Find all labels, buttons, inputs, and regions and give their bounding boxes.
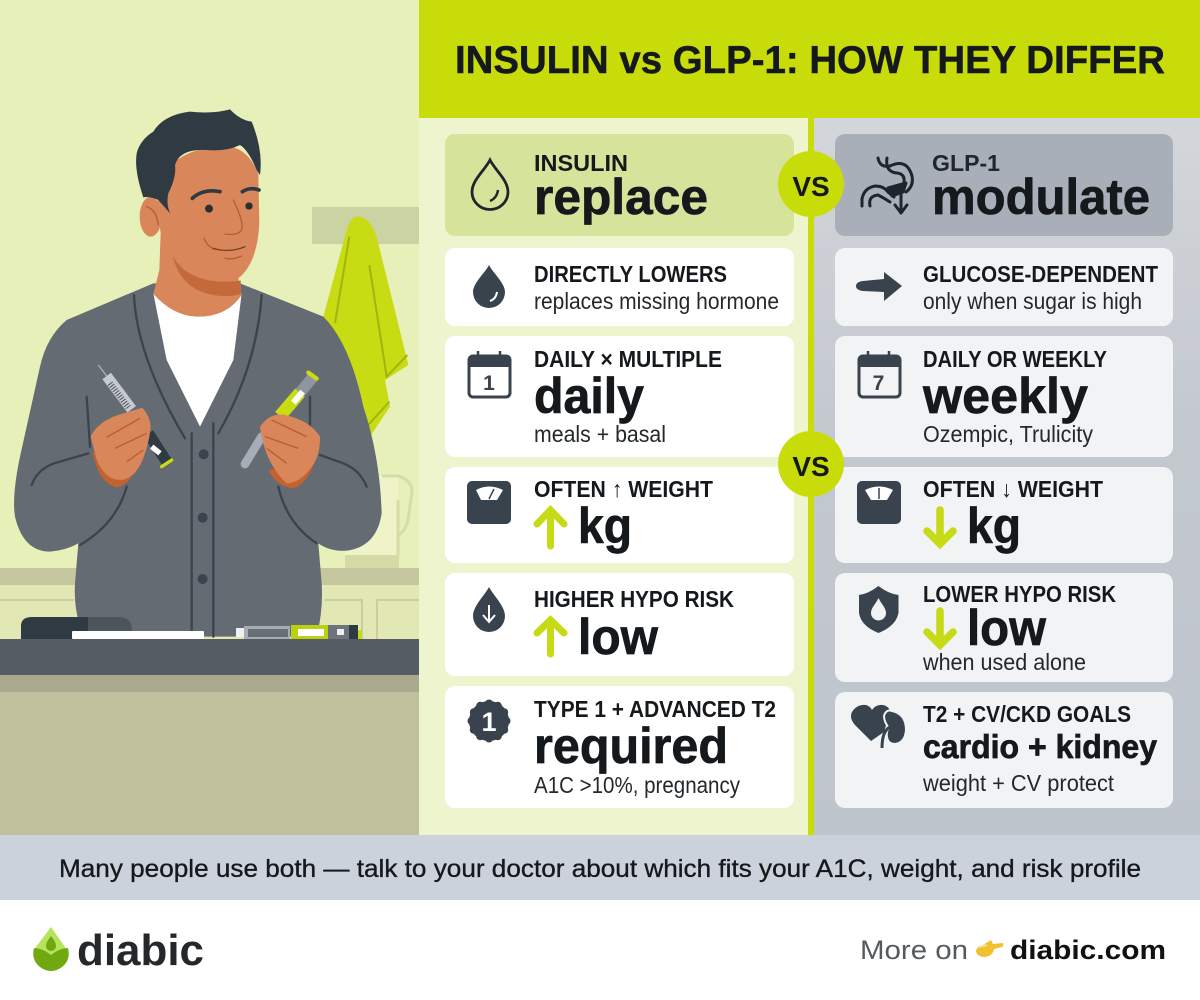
footer link: More on (860, 935, 968, 965)
card: lower hypo risk: low (967, 600, 1046, 656)
card: hypo risk (445, 573, 794, 676)
bottom note band (0, 835, 1200, 900)
towel rail (312, 207, 419, 244)
icon: pointing hand (976, 940, 1003, 957)
card: weekly dosing: DAILY OR WEEKLY (923, 346, 1107, 372)
card: heart and kidney benefits: T2 + CV/CKD GOALS (923, 701, 1131, 727)
icon: filled drop (473, 265, 505, 308)
arrow up (537, 620, 564, 654)
arrow up (537, 510, 564, 546)
face and neck (153, 147, 259, 317)
card: weekly dosing: weekly (922, 368, 1088, 424)
card: who needs insulin: A1C >10%, pregnancy (534, 772, 740, 798)
cardigan seams (32, 295, 367, 637)
card: directly lowers (445, 248, 794, 326)
bottom note band: Many people use both — talk to your doctor about which fits your A1C, weight, and risk profile (59, 855, 1141, 883)
card: heart and kidney benefits: weight + CV protect (922, 770, 1115, 796)
card: daily dosing: DAILY × MULTIPLE (534, 346, 722, 372)
VS badge top (778, 151, 844, 217)
panel: GLP-1 column (814, 118, 1200, 835)
illustration panel: man holding two pens in a kitchen (0, 0, 419, 835)
card: who needs insulin: TYPE 1 + ADVANCED T2 (534, 696, 776, 722)
VS badge middle: VS (792, 451, 830, 482)
icon: heart and kidney (851, 705, 906, 748)
centre divider (808, 118, 814, 835)
VS badge middle (778, 431, 844, 497)
left hand (93, 410, 149, 487)
icon: shield with drop (859, 586, 898, 633)
desk objects: dark pouch and pad (21, 617, 204, 639)
man figure (14, 109, 382, 637)
GLP-1 header card (835, 134, 1173, 236)
icon: calendar 7 (858, 351, 900, 397)
cardigan (14, 283, 382, 637)
panel: insulin column (419, 118, 808, 835)
GLP-1 pen, right hand (245, 373, 317, 464)
icon: stomach with arrow (862, 158, 912, 213)
insulin header card (445, 134, 794, 236)
card: lower hypo risk (835, 573, 1173, 682)
card: directly lowers: replaces missing hormone (534, 288, 779, 314)
footer link (860, 935, 1166, 965)
card: hypo risk: HIGHER HYPO RISK (534, 586, 734, 612)
towel (323, 217, 408, 437)
card: weight loss (835, 467, 1173, 563)
insulin heading: INSULIN (534, 150, 628, 176)
card: daily dosing: meals + basal (534, 421, 666, 447)
arrow down (927, 611, 953, 645)
ear (140, 197, 162, 237)
icon: badge 1: 1 (481, 707, 497, 737)
insulin heading: replace (534, 169, 708, 225)
card: lower hypo risk: when used alone (922, 649, 1086, 675)
icon: calendar 1: 1 (483, 372, 495, 395)
icon: arrow right (856, 272, 902, 301)
icon: drop with arrow (473, 587, 505, 632)
GLP-1 heading: GLP-1 (932, 150, 1000, 176)
card: weight gain: OFTEN ↑ WEIGHT (534, 476, 713, 502)
card: heart and kidney benefits: cardio + kidney (923, 728, 1158, 765)
right hand (262, 416, 318, 488)
insulin pen, left hand (98, 365, 172, 467)
icon: scale (857, 481, 901, 524)
desk surface (0, 639, 419, 835)
footer link: diabic.com (1010, 935, 1166, 965)
facial features (147, 189, 259, 259)
desk object: pen lying flat (236, 625, 362, 639)
back counter and cabinets (0, 568, 419, 640)
card: lower hypo risk: LOWER HYPO RISK (923, 581, 1116, 607)
buttons (198, 449, 209, 584)
icon: scale (467, 481, 511, 524)
card: directly lowers: DIRECTLY LOWERS (534, 261, 727, 287)
card: hypo risk: low (578, 609, 658, 665)
logo: diabic: diabic (77, 926, 204, 975)
card: weight gain (445, 467, 794, 563)
blender (345, 476, 412, 568)
card: daily dosing (445, 336, 794, 457)
card: weight gain: kg (578, 498, 632, 554)
card: weekly dosing (835, 336, 1173, 457)
card: daily dosing: daily (534, 368, 644, 424)
icon: calendar 1 (468, 351, 511, 397)
card: weekly dosing: Ozempic, Trulicity (923, 421, 1093, 447)
card: who needs insulin (445, 686, 794, 808)
title banner (419, 0, 1200, 118)
card: who needs insulin: required (534, 718, 728, 774)
card: weight loss: kg (967, 498, 1021, 554)
title: INSULIN vs GLP-1: HOW THEY DIFFER (455, 39, 1165, 82)
shirt (153, 293, 242, 427)
icon: badge 1 (468, 700, 510, 742)
hair (136, 109, 261, 213)
icon: outlined drop (472, 160, 508, 210)
VS badge top: VS (792, 171, 830, 202)
card: weight loss: OFTEN ↓ WEIGHT (923, 476, 1103, 502)
GLP-1 heading: modulate (932, 169, 1150, 225)
icon: calendar 7: 7 (873, 372, 884, 395)
card: heart and kidney benefits (835, 692, 1173, 808)
card: glucose-dependent: only when sugar is high (923, 288, 1142, 314)
jaw shadow (173, 256, 241, 296)
arrow down (927, 510, 953, 544)
icon: green drop (33, 927, 69, 971)
card: glucose-dependent (835, 248, 1173, 326)
card: glucose-dependent: GLUCOSE-DEPENDENT (923, 261, 1158, 287)
